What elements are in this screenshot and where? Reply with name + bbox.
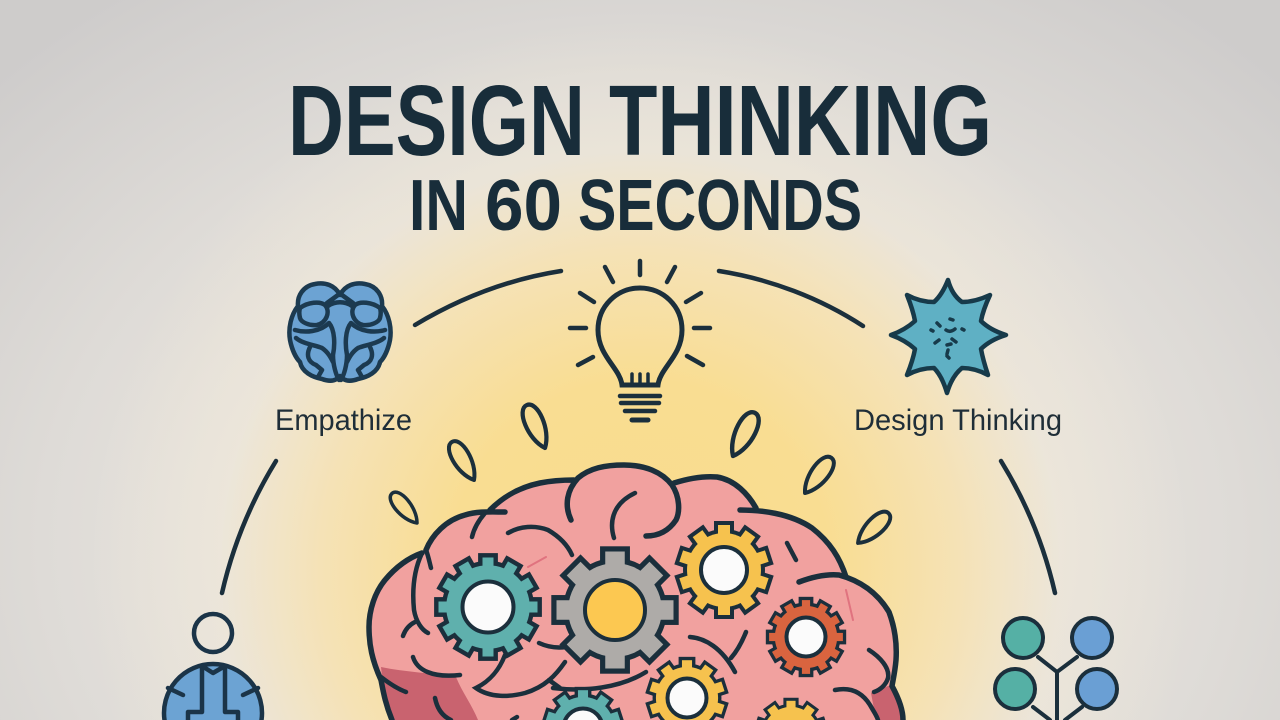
subtitle: In: IN [409, 166, 468, 246]
tree node blue lower [1077, 669, 1117, 709]
connecting arcs [222, 271, 1055, 593]
brain shading left [381, 667, 478, 720]
label: Empathize: Empathize [275, 404, 412, 437]
brain body [369, 465, 903, 720]
brain shading right [871, 684, 903, 720]
gear: grey with yellow hub [556, 552, 674, 668]
title word: Thinking: THINKING [609, 65, 992, 177]
idea sparks above brain [386, 401, 895, 549]
title [288, 65, 992, 246]
subtitle: 60: 60 [485, 166, 562, 246]
brain flush marks [528, 557, 853, 620]
tree node teal lower [995, 669, 1035, 709]
tree node blue upper [1072, 618, 1112, 658]
brain outline [369, 465, 903, 720]
label: Design Thinking: Design Thinking [854, 404, 1062, 437]
tree node teal upper [1003, 618, 1043, 658]
starburst dots [931, 319, 964, 358]
gear: teal lower [545, 690, 621, 720]
gear: teal [438, 558, 538, 656]
bulb glass [598, 288, 682, 385]
gear: yellow upper [679, 525, 769, 615]
title word: Design: DESIGN [288, 65, 585, 177]
icon: teal starburst [891, 280, 1006, 393]
gear: yellow bottom [757, 701, 825, 720]
central brain with gears [369, 465, 903, 720]
brain folds [381, 493, 888, 720]
gear: red [769, 600, 843, 674]
bulb filament [632, 374, 648, 384]
bulb rays [570, 261, 710, 365]
bulb base [620, 396, 660, 411]
person body [164, 664, 262, 720]
tree branches [1033, 657, 1082, 720]
subtitle: Seconds: SECONDS [578, 166, 862, 246]
icon: blue brain [289, 283, 391, 381]
icon: light bulb [570, 261, 710, 420]
gear: yellow lower [649, 660, 725, 720]
person body lines [168, 666, 258, 720]
person head [194, 614, 232, 652]
icon: person with brain [164, 614, 262, 720]
icon: branching tree [995, 618, 1117, 720]
